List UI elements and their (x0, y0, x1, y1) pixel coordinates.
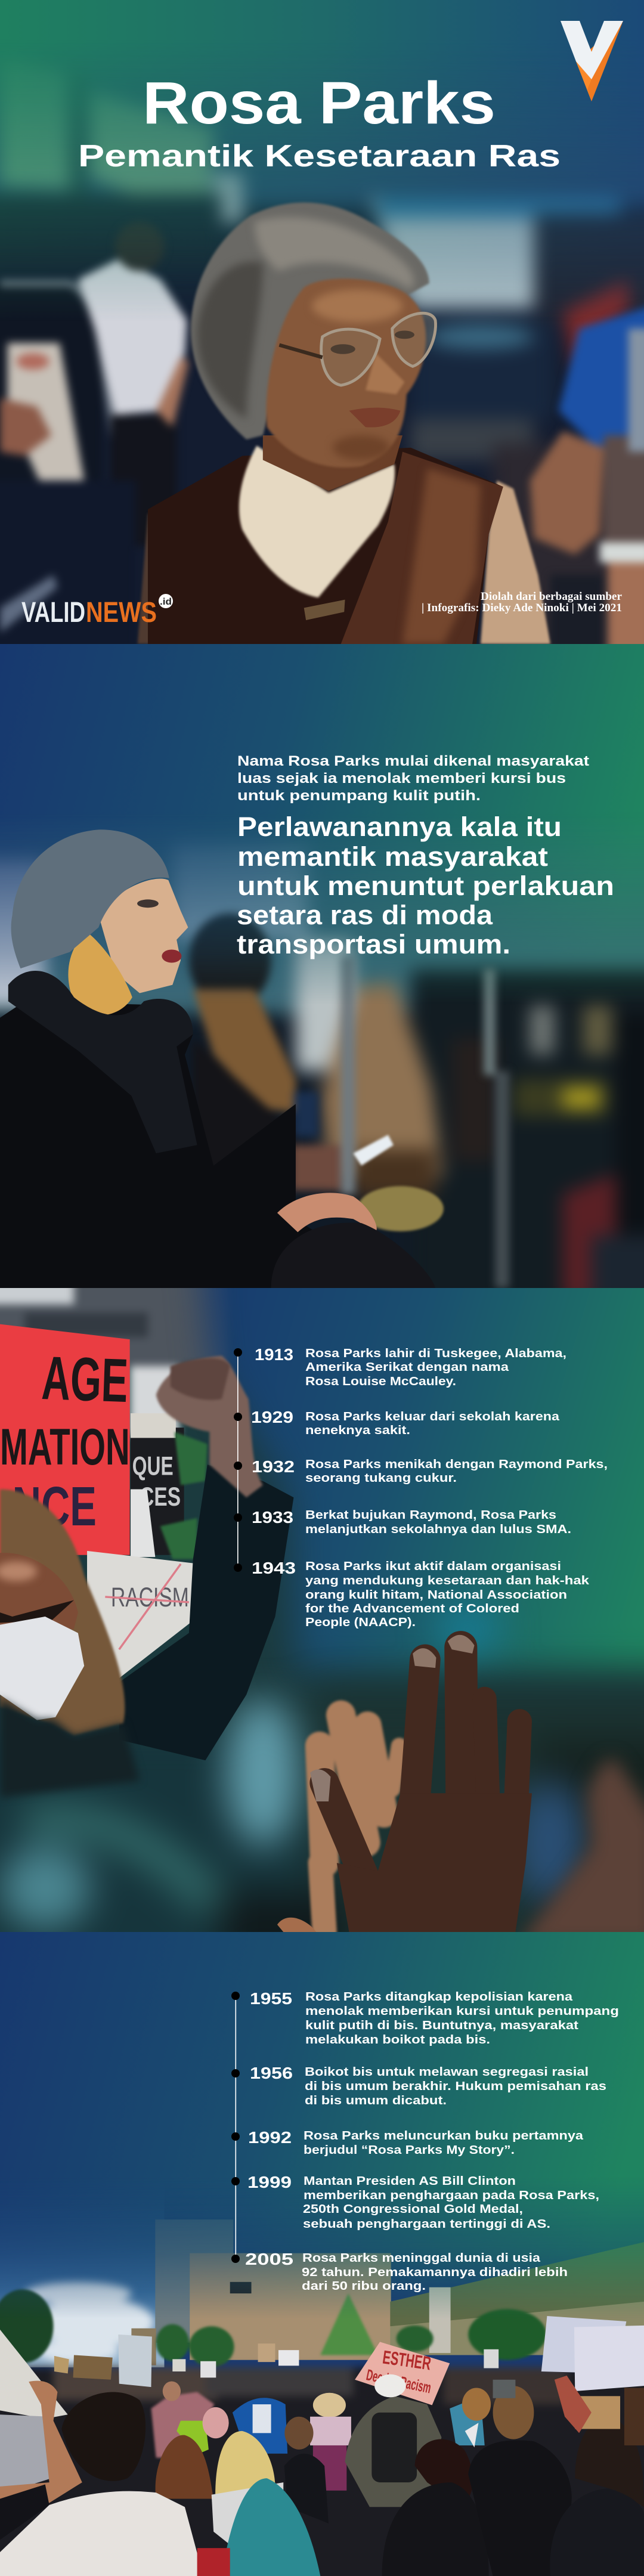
entry 1999 (247, 2173, 599, 2231)
timeline 1913 to 1943 (234, 1345, 608, 1629)
sign: red placard: NCE (13, 1475, 97, 1537)
source credit (422, 590, 623, 614)
entry 1933: melanjutkan sekolahnya dan lulus SMA. (305, 1523, 571, 1536)
entry 1992: Rosa Parks meluncurkan buku pertamnya (304, 2129, 584, 2142)
sky (0, 2178, 165, 2367)
sign: black placard (131, 1413, 184, 1555)
teal top (450, 2396, 485, 2445)
gradient overlay right, softly feathered (197, 1206, 644, 1670)
entry 1943: orang kulit hitam, National Association (305, 1589, 567, 1602)
entry 1956: di bis umum dicabut. (305, 2094, 447, 2107)
panel: protest photo with raised fist and hands (0, 1288, 644, 1932)
entry 2005: dari 50 ribu orang. (302, 2280, 426, 2293)
white shirt (212, 2482, 283, 2548)
placard ESTHER (355, 2342, 450, 2405)
seat, passenger and arm (0, 222, 644, 661)
source credit: | Infografis: Dieky Ade Ninoki | Mei 2021 (422, 602, 622, 614)
teal hair (222, 2478, 320, 2576)
entry 1933: 1933 (252, 1508, 293, 1527)
woman in face mask (0, 1490, 140, 1797)
title (78, 70, 561, 174)
eye (137, 899, 159, 908)
face (98, 878, 188, 993)
entry 1932 (252, 1457, 608, 1485)
dark hair head (61, 2392, 145, 2481)
brooch (304, 600, 345, 620)
trees (0, 2289, 546, 2367)
entry 1929: neneknya sakit. (305, 1424, 410, 1437)
entry 1992 (248, 2128, 584, 2157)
entry 1929 (251, 1408, 560, 1437)
scarf (239, 445, 395, 597)
sleeves (138, 481, 550, 644)
placard ESTHER: Decries Racism (365, 2366, 433, 2397)
train poles (341, 956, 509, 1288)
entry 2005: 2005 (245, 2250, 293, 2268)
black handbag (271, 1222, 435, 1288)
backpack (371, 2413, 417, 2482)
entry 1955: Rosa Parks ditangkap kepolisian karena (305, 1990, 573, 2004)
phone (353, 1135, 394, 1166)
protest signs (0, 1324, 208, 1678)
sign: black placard: QUE (132, 1451, 174, 1481)
panel: commuter woman on train (0, 644, 644, 1288)
sign: red placard (0, 1324, 130, 1555)
sign: racism crossed out (87, 1551, 193, 1678)
intro text block (237, 753, 614, 959)
sun hat (313, 2393, 346, 2417)
entry 1933: Berkat bujukan Raymond, Rosa Parks (305, 1509, 556, 1522)
entry 1956 (250, 2064, 606, 2107)
face (266, 278, 426, 467)
entry 1999: memberikan penghargaan pada Rosa Parks, (304, 2189, 599, 2202)
gradient overlay (0, 1932, 644, 2314)
raised arm and fist (119, 1356, 293, 1760)
entry 1932: 1932 (252, 1457, 295, 1476)
entry 1933 (252, 1508, 571, 1536)
woman in knit hat (0, 829, 435, 1288)
vest (148, 448, 503, 644)
hair (191, 203, 429, 439)
entry 1943: People (NAACP). (305, 1616, 416, 1629)
entry 1943 (252, 1559, 590, 1629)
highlighted statement: setara ras di moda (237, 900, 493, 930)
blurred bus interior background (0, 0, 644, 685)
entry 1992: berjudul “Rosa Parks My Story”. (304, 2144, 515, 2157)
city buildings (131, 2219, 644, 2366)
source credit: Diolah dari berbagai sumber (481, 590, 623, 603)
title: Rosa Parks (143, 70, 496, 137)
logo: ValidNews.id: NEWS (86, 597, 157, 628)
entry 1955: kulit putih di bis. Buntutnya, masyarakat (305, 2019, 578, 2032)
entry 1943: for the Advancement of Colored (305, 1602, 519, 1615)
lower blurred crowd (0, 1604, 644, 1978)
entry 1913: Rosa Parks lahir di Tuskegee, Alabama, (305, 1347, 566, 1360)
entry 1999: 1999 (247, 2173, 292, 2191)
floral top (310, 2417, 351, 2445)
blurred street background (0, 1271, 230, 1436)
entry 1956: Boikot bis untuk melawan segregasi rasial (305, 2066, 589, 2079)
placard left with arm (0, 2330, 68, 2419)
entry 2005 (245, 2250, 568, 2293)
entry 1943: 1943 (252, 1559, 296, 1577)
blurred hand right (518, 1759, 644, 1945)
black hoodie (284, 2454, 329, 2524)
striped shirt (0, 2414, 51, 2495)
entry 1943: Rosa Parks ikut aktif dalam organisasi (305, 1560, 561, 1573)
timeline axis (234, 1348, 242, 1572)
entry 1955: menolak memberikan kursi untuk penumpang (305, 2005, 619, 2018)
lips (162, 949, 181, 962)
sign: red placard: MATION (0, 1419, 130, 1476)
sign: red placard: AGE (41, 1343, 129, 1415)
icon: V brand mark (561, 21, 623, 101)
khaki man (345, 2396, 441, 2507)
neck (263, 435, 402, 491)
highlighted statement (237, 812, 614, 959)
entry 1932: seorang tukang cukur. (305, 1472, 457, 1485)
entry 1955 (250, 1989, 619, 2046)
subtitle: Pemantik Kesetaraan Ras (78, 139, 561, 174)
entry 1913 (255, 1345, 566, 1388)
entry 1956: 1956 (250, 2064, 293, 2082)
blue shirt (233, 2398, 287, 2454)
coat (0, 1001, 402, 1288)
black coat figures (382, 2482, 489, 2576)
leaves (160, 1432, 208, 1559)
sign: racism crossed out: RACISM (111, 1582, 189, 1612)
panel: crowd protest march (0, 1932, 644, 2576)
foreground dark hand (277, 1635, 532, 1932)
hair right (575, 2418, 644, 2507)
highlighted statement: Perlawanannya kala itu (237, 812, 562, 842)
timeline axis (231, 1992, 240, 2263)
back placards (54, 2334, 499, 2387)
entry 2005: 92 tahun. Pemakamannya dihadiri lebih (302, 2266, 568, 2279)
glasses (321, 313, 436, 385)
green bag (177, 2421, 209, 2454)
white t-shirt front (0, 2491, 203, 2576)
entry 1929: Rosa Parks keluar dari sekolah karena (305, 1410, 560, 1423)
entry 2005: Rosa Parks meninggal dunia di usia (302, 2252, 541, 2265)
entry 1999: sebuah penghargaan tertinggi di AS. (303, 2218, 550, 2231)
entry 1955: melakukan boikot pada bis. (305, 2033, 490, 2046)
blond hair (68, 931, 132, 1015)
intro text block: luas sejak ia menolak memberi kursi bus (237, 770, 566, 787)
clouds (24, 2282, 154, 2363)
gold bag (357, 1186, 444, 1231)
intro text block: untuk penumpang kulit putih. (237, 788, 481, 804)
blurred train interior (0, 809, 644, 1329)
black sleeve (0, 2484, 49, 2540)
eyes (330, 344, 355, 354)
logo: ValidNews.id: .id (160, 597, 172, 607)
highlighted statement: transportasi umum. (237, 929, 510, 959)
highlighted statement: memantik masyarakat (237, 841, 548, 872)
logo: ValidNews.id (21, 594, 173, 628)
entry 1913: Rosa Louise McCauley. (305, 1375, 456, 1388)
placards right (541, 2316, 644, 2391)
timeline 1955 to 2005 (231, 1989, 619, 2293)
entry 1955: 1955 (250, 1989, 292, 2008)
second passenger (189, 913, 345, 1190)
gradient overlay (0, 644, 644, 997)
entry 1913: 1913 (255, 1345, 293, 1364)
crowd mass (0, 2367, 644, 2576)
panel: cover photo of Rosa Parks on the bus (0, 0, 644, 644)
blond hair (215, 2431, 275, 2519)
scarf (8, 971, 197, 1153)
knit hat (11, 829, 169, 968)
gradient overlay (0, 0, 644, 310)
pink hair (203, 2407, 229, 2438)
intro text block: Nama Rosa Parks mulai dikenal masyarakat (237, 753, 589, 769)
logo: ValidNews.id: VALID (21, 597, 85, 628)
red brown hair (156, 2435, 213, 2499)
entry 1913: Amerika Serikat dengan nama (305, 1361, 509, 1374)
entry 1999: Mantan Presiden AS Bill Clinton (304, 2175, 516, 2188)
plaid shirt (151, 2392, 215, 2458)
protesters (0, 2374, 644, 2576)
entry 1932: Rosa Parks menikah dengan Raymond Parks, (305, 1458, 608, 1471)
Rosa Parks figure (138, 203, 550, 644)
hands (277, 1193, 377, 1232)
entry 1999: 250th Congressional Gold Medal, (303, 2203, 523, 2216)
entry 1943: yang mendukung kesetaraan dan hak-hak (305, 1574, 590, 1587)
sign: black placard: CES (140, 1482, 181, 1512)
entry 1929: 1929 (251, 1408, 293, 1426)
raised arm (0, 2381, 82, 2507)
red hair (415, 2439, 473, 2505)
entry 1956: di bis umum berakhir. Hukum pemisahan ras (305, 2080, 606, 2093)
entry 1992: 1992 (248, 2128, 292, 2147)
foreground hand behind (320, 1715, 399, 1932)
placard ESTHER: ESTHER (382, 2346, 432, 2374)
highlighted statement: untuk menuntut perlakuan (237, 871, 614, 901)
